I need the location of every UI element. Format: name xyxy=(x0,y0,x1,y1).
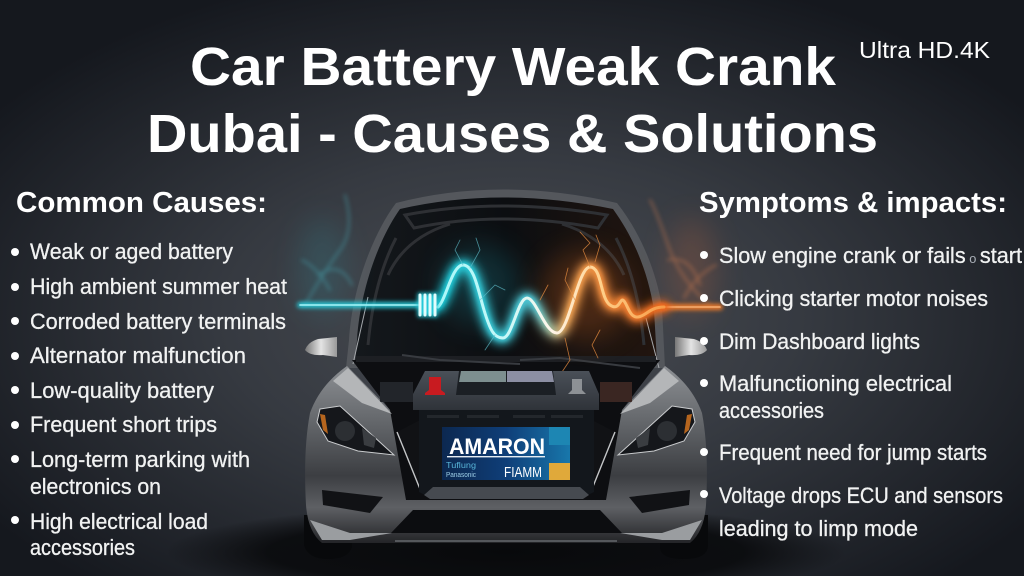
gold sticker xyxy=(549,463,570,480)
hood inner lining xyxy=(355,198,657,362)
tyres xyxy=(304,515,708,559)
ambient glows xyxy=(298,218,346,318)
symptoms list: leading to limp mode xyxy=(719,516,918,541)
right headlight and fender xyxy=(592,368,702,540)
resolution tag: Ultra HD.4K xyxy=(859,37,991,63)
title xyxy=(147,37,878,164)
car body xyxy=(305,366,707,543)
causes bullets xyxy=(11,248,19,524)
causes heading: Common Causes: xyxy=(16,187,267,219)
energy wave xyxy=(298,195,720,372)
symptoms list: Frequent need for jump starts xyxy=(719,440,987,465)
title: Car Battery Weak Crank xyxy=(190,37,837,97)
symptoms list: Slow engine crank or fails o start xyxy=(719,243,1022,268)
bumper highlight xyxy=(395,540,617,542)
causes list: Long-term parking with xyxy=(30,447,250,472)
small label text 2: Panasonic xyxy=(446,472,476,479)
top module xyxy=(456,371,556,395)
brand underline xyxy=(447,456,545,457)
small label text: Tuflung xyxy=(446,461,476,470)
positive terminal xyxy=(425,377,445,395)
module display xyxy=(459,371,506,382)
panel: symptoms and impacts xyxy=(699,187,1022,541)
causes list: accessories xyxy=(30,535,135,560)
sparks xyxy=(540,232,600,372)
battery case xyxy=(419,408,594,499)
blue tag xyxy=(549,427,570,445)
left mirror xyxy=(305,337,337,357)
car illustration xyxy=(166,190,846,576)
smoke wisps xyxy=(302,195,716,305)
battery base teeth xyxy=(424,487,589,499)
engine parts xyxy=(380,382,632,402)
causes list: Low-quality battery xyxy=(30,378,214,403)
right mirror xyxy=(675,337,707,357)
title: Dubai - Causes & Solutions xyxy=(147,104,878,164)
engine bay xyxy=(352,360,660,500)
symptoms bullets xyxy=(700,251,708,498)
causes list: High electrical load xyxy=(30,509,208,534)
causes list: Frequent short trips xyxy=(30,412,217,437)
causes list xyxy=(30,239,287,560)
wipers xyxy=(402,355,640,368)
wiper band xyxy=(356,356,656,362)
causes list: electronics on xyxy=(30,474,161,499)
open hood xyxy=(346,190,665,368)
brand name: AMARON xyxy=(449,434,545,459)
symptoms list: Dim Dashboard lights xyxy=(719,329,920,354)
symptoms list: Clicking starter motor noises xyxy=(719,286,988,311)
symptoms list xyxy=(719,243,1022,541)
negative terminal xyxy=(568,379,586,394)
causes list: Corroded battery terminals xyxy=(30,309,286,334)
symptoms list: accessories xyxy=(719,398,824,423)
causes list: Alternator malfunction xyxy=(30,343,246,368)
hood struts xyxy=(353,297,659,368)
ground shadow xyxy=(166,504,846,576)
secondary brand: FIAMM xyxy=(504,464,542,481)
wave glow xyxy=(438,265,664,338)
symptoms heading: Symptoms & impacts: xyxy=(699,187,1007,219)
causes list: High ambient summer heat xyxy=(30,274,287,299)
symptoms list: Voltage drops ECU and sensors xyxy=(719,483,1003,508)
horizontal beams xyxy=(300,302,420,308)
symptoms list: Malfunctioning electrical xyxy=(719,371,952,396)
wave core xyxy=(438,265,664,338)
left headlight and fender xyxy=(310,368,420,540)
lower bumper grille xyxy=(391,510,622,533)
hood inner panel ribs xyxy=(368,206,644,345)
lid vents xyxy=(427,415,583,418)
causes list: Weak or aged battery xyxy=(30,239,233,264)
battery label xyxy=(442,427,570,480)
coil comb xyxy=(420,295,435,315)
coil comb glow xyxy=(420,295,435,315)
battery lid xyxy=(413,371,599,410)
car battery xyxy=(413,371,599,499)
panel: common causes xyxy=(11,187,287,560)
